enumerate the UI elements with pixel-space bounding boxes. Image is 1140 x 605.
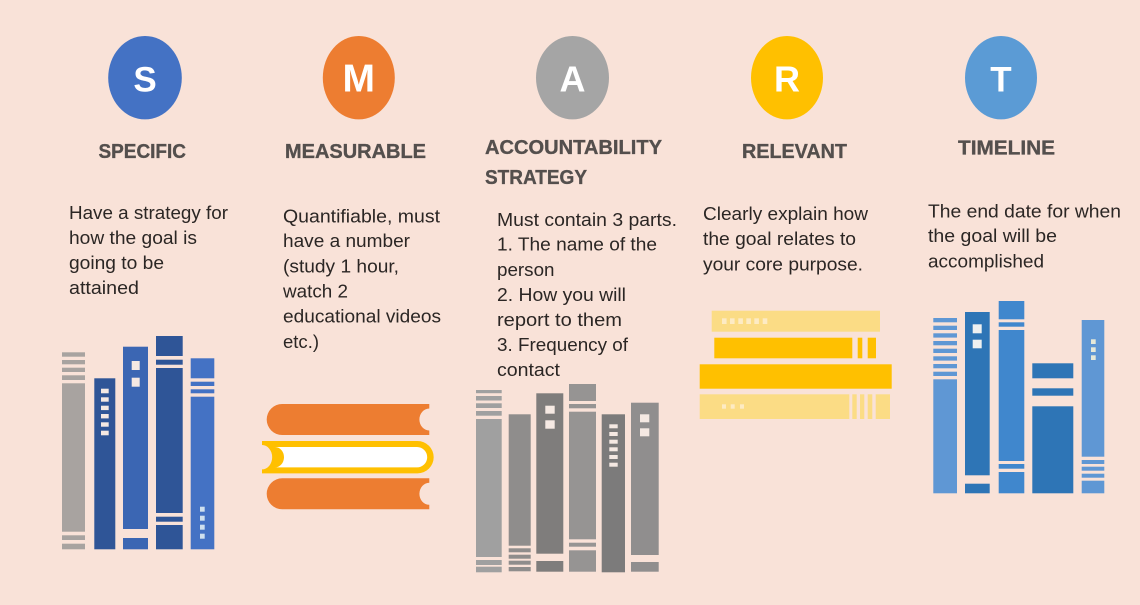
panel: accountability strategy: [476, 36, 677, 572]
icon: letter S circle: [108, 36, 182, 119]
text block: measurable description: have a number: [283, 230, 410, 251]
icon: letter S circle: S: [133, 60, 157, 100]
icon: letter R circle: [751, 36, 823, 119]
heading: measurable: MEASURABLE: [285, 141, 426, 163]
icon: letter M circle: M: [343, 58, 375, 100]
heading: timeline: TIMELINE: [958, 137, 1055, 159]
text block: specific description: how the goal is: [69, 227, 197, 248]
text block: accountability description: 2. How you will: [497, 284, 626, 305]
panel: specific: [62, 36, 228, 549]
text block: timeline description: accomplished: [928, 250, 1044, 271]
icon: letter T circle: T: [990, 60, 1012, 100]
text block: accountability description: [497, 209, 677, 380]
icon: letter A circle: [536, 36, 609, 119]
panel: measurable: [262, 36, 441, 509]
panel: timeline: [928, 36, 1121, 493]
icon: letter R circle: R: [774, 58, 800, 100]
text block: measurable description: etc.): [283, 331, 319, 352]
text block: timeline description: The end date for when: [928, 201, 1121, 222]
icon: letter M circle: [323, 36, 395, 119]
text block: accountability description: 1. The name of the: [497, 234, 657, 254]
text block: measurable description: educational videos: [283, 306, 441, 327]
icon: letter A circle: A: [560, 58, 586, 100]
text block: measurable description: watch 2: [282, 281, 348, 302]
text block: relevant description: [703, 203, 869, 274]
text block: accountability description: contact: [497, 359, 560, 380]
icon: standing gray books: [476, 384, 659, 572]
text block: relevant description: Clearly explain how: [703, 203, 869, 224]
heading: specific: SPECIFIC: [98, 141, 186, 163]
icon: stacked yellow books: [700, 311, 892, 419]
icon: letter T circle: [965, 36, 1037, 119]
text block: accountability description: 3. Frequency of: [497, 334, 629, 355]
text block: specific description: [69, 202, 228, 298]
panel: relevant: [700, 36, 892, 419]
icon: standing blue books: [62, 336, 214, 549]
text block: specific description: going to be: [69, 252, 164, 273]
text block: accountability description: report to them: [497, 309, 622, 330]
heading: accountability strategy: ACCOUNTABILITY: [485, 137, 663, 159]
icon: standing light blue books: [933, 301, 1104, 493]
heading: relevant: RELEVANT: [742, 141, 847, 163]
text block: timeline description: [928, 201, 1121, 271]
icon: stacked orange books: [262, 404, 434, 509]
text block: relevant description: your core purpose.: [703, 254, 863, 274]
text block: measurable description: [282, 205, 441, 352]
text block: measurable description: Quantifiable, must: [283, 205, 440, 226]
text block: measurable description: (study 1 hour,: [283, 256, 399, 277]
heading: accountability strategy: [485, 137, 663, 189]
text block: accountability description: person: [497, 259, 554, 280]
heading: accountability strategy: STRATEGY: [485, 167, 588, 189]
text block: specific description: attained: [69, 277, 139, 298]
text block: accountability description: Must contain 3 parts.: [497, 209, 677, 230]
text block: timeline description: the goal will be: [928, 225, 1057, 246]
text block: specific description: Have a strategy for: [69, 202, 228, 223]
text block: relevant description: the goal relates to: [703, 228, 856, 249]
